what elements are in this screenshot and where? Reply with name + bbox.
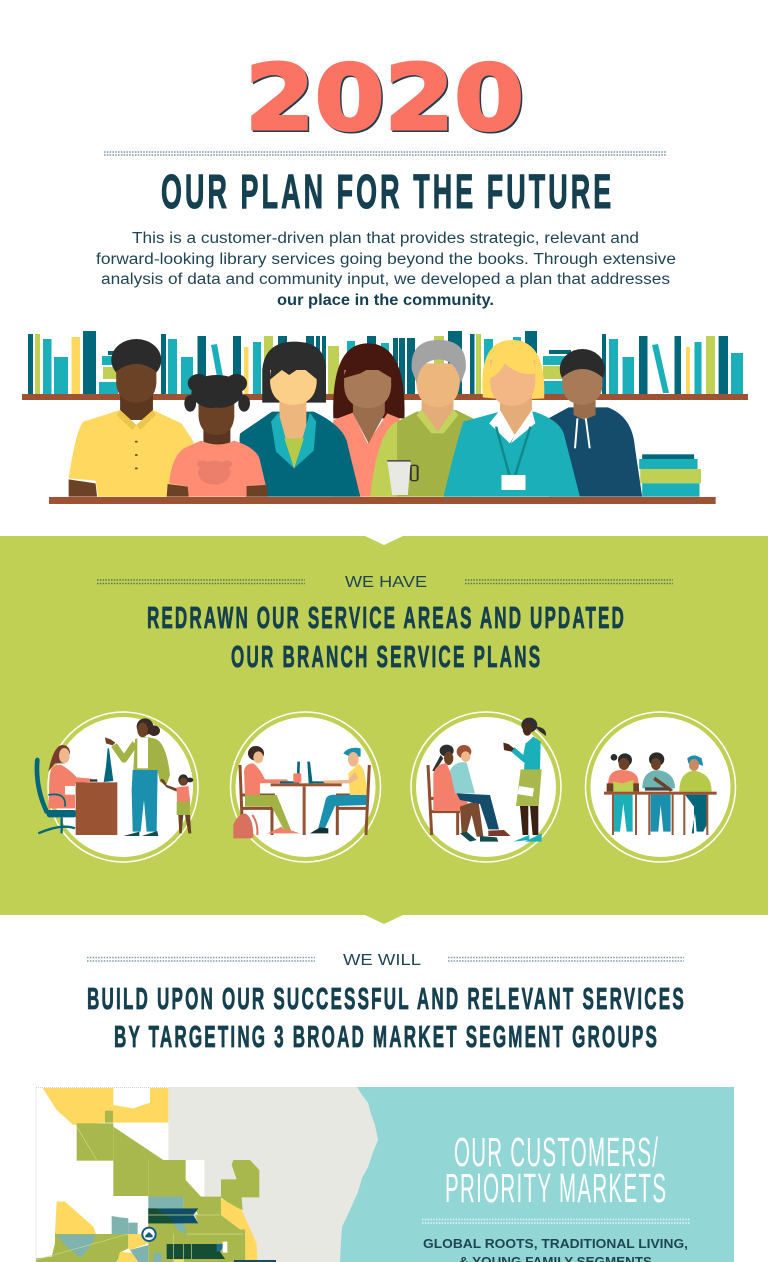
heading: redrawn service areas: [147, 601, 624, 674]
intro text: our place in the community.: [277, 292, 494, 309]
title: 2020: 2020: [246, 48, 526, 152]
icon: library marker: [141, 1227, 157, 1242]
illustration: bookshelf with people: [22, 331, 748, 504]
lake with panel background: [340, 1087, 734, 1262]
intro text: [96, 230, 676, 309]
person: yellow shirt man: [69, 339, 194, 497]
person: hoodie boy: [548, 349, 642, 497]
scene: students studying at a long desk: [586, 712, 736, 862]
label: we will: WE WILL: [343, 952, 421, 969]
person: woman with salmon top: [332, 343, 405, 497]
text: market segments: GLOBAL ROOTS, TRADITIONAL LIVING,: [423, 1237, 688, 1251]
scene: community members with a librarian: [411, 712, 561, 862]
panel: market map: [36, 1087, 734, 1262]
heading: our customers / priority markets: [445, 1129, 666, 1211]
intro text: forward-looking library services going beyond the books. Through extensive: [96, 251, 676, 268]
heading: our customers / priority markets: PRIORITY MARKETS: [445, 1165, 666, 1211]
person: grey-haired man: [370, 340, 473, 497]
title: 2020: 2020: [245, 46, 524, 151]
icon: mug: [387, 460, 418, 495]
intro text: analysis of data and community input, we developed a plan that addresses: [101, 271, 670, 288]
map of service areas: [36, 1087, 276, 1262]
heading: build upon services: [87, 982, 684, 1054]
scene: students at a table: [230, 712, 380, 862]
lower shelf: [49, 497, 716, 504]
panel: we have: [0, 536, 768, 924]
person: librarian with lanyard: [444, 340, 580, 497]
heading: our customers / priority markets: OUR CUSTOMERS/: [454, 1129, 658, 1175]
heading: our plan for the future: OUR PLAN FOR THE FUTURE: [161, 166, 611, 219]
people: [49, 339, 716, 504]
intro text: This is a customer-driven plan that provides strategic, relevant and: [132, 230, 639, 247]
heading: build upon services: BUILD UPON OUR SUCCESSFUL AND RELEVANT SERVICES: [87, 982, 684, 1016]
person: girl with bear tee: [167, 374, 268, 497]
heading: redrawn service areas: REDRAWN OUR SERVICE AREAS AND UPDATED: [147, 601, 624, 635]
scene: library staff at desk: [37, 712, 198, 862]
person: woman in teal jacket: [240, 342, 360, 497]
heading: build upon services: BY TARGETING 3 BROAD MARKET SEGMENT GROUPS: [114, 1020, 657, 1054]
bookshelf: [22, 331, 748, 400]
book stack: [639, 454, 701, 497]
heading: redrawn service areas: OUR BRANCH SERVICE PLANS: [231, 640, 540, 674]
text: market segments: [423, 1237, 688, 1262]
label: we have: WE HAVE: [345, 574, 427, 591]
